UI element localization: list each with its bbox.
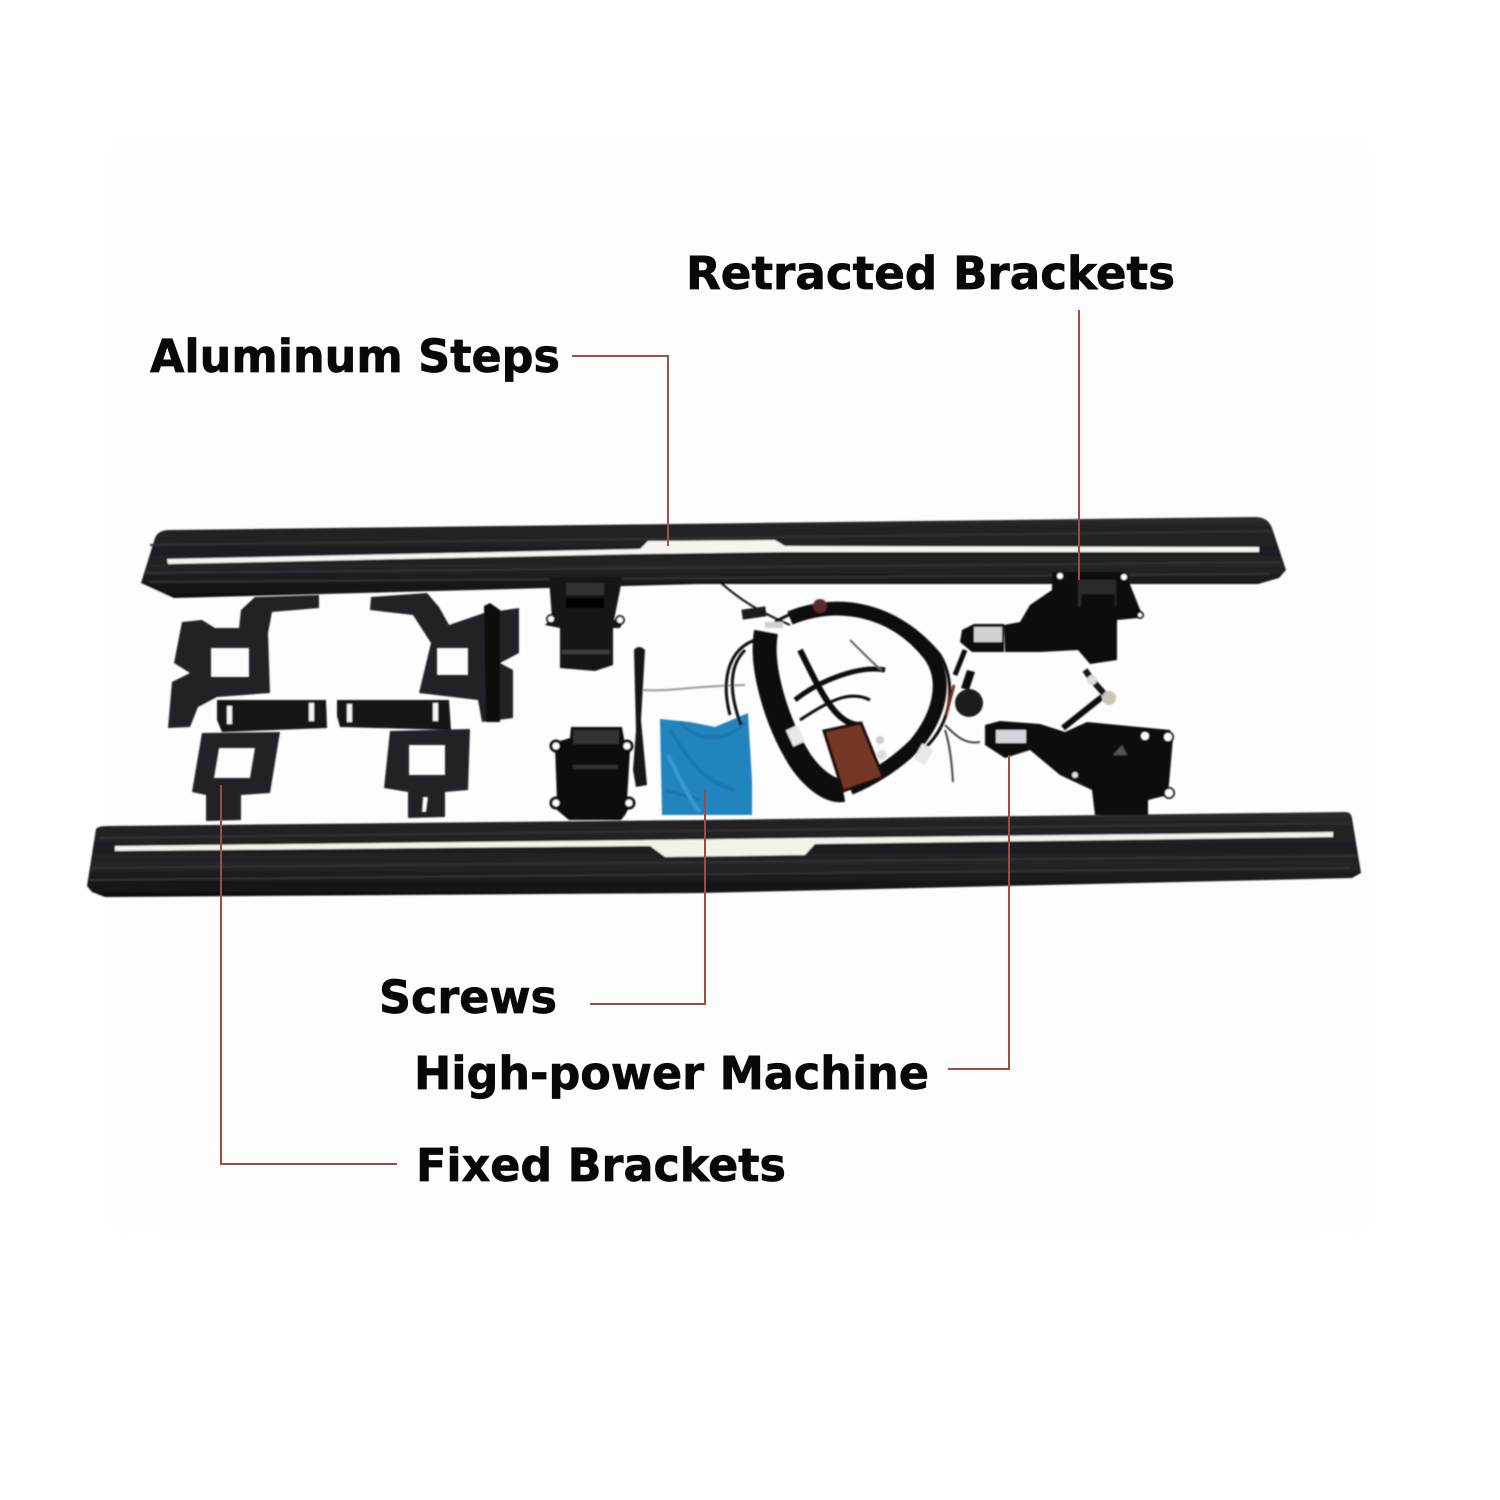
label: screws: Screws — [379, 971, 557, 1024]
label: aluminum steps: Aluminum Steps — [150, 330, 560, 383]
icon: blue screw bag — [660, 713, 752, 815]
control box — [824, 723, 883, 791]
label: retracted brackets: Retracted Brackets — [686, 247, 1175, 300]
angle bar left — [217, 700, 327, 732]
retracted bracket with motor lower — [985, 721, 1174, 815]
bottom aluminum step — [87, 812, 1361, 897]
cable ties — [633, 647, 745, 787]
leader line: retracted brackets — [1078, 310, 1080, 580]
retracted bracket with motor upper — [960, 572, 1143, 664]
retracted bracket lower middle — [551, 727, 634, 820]
leader line: screws — [590, 790, 705, 1004]
label: high-power machine: High-power Machine — [414, 1047, 929, 1100]
flat bracket right — [384, 729, 470, 818]
label: fixed brackets: Fixed Brackets — [416, 1139, 786, 1192]
top aluminum step — [141, 517, 1286, 598]
leader line: fixed brackets — [221, 785, 397, 1164]
fixed bracket upper left — [168, 595, 319, 728]
harness connectors — [741, 599, 983, 765]
fixed bracket upper right — [370, 593, 519, 722]
leader line: aluminum steps — [572, 356, 668, 546]
flat bracket left — [192, 732, 280, 821]
wiring harness — [720, 582, 980, 790]
retracted bracket upper middle — [545, 577, 624, 671]
angle bar right — [337, 700, 451, 730]
leader line: high-power machine — [948, 755, 1009, 1069]
connecting rod — [1063, 670, 1116, 728]
